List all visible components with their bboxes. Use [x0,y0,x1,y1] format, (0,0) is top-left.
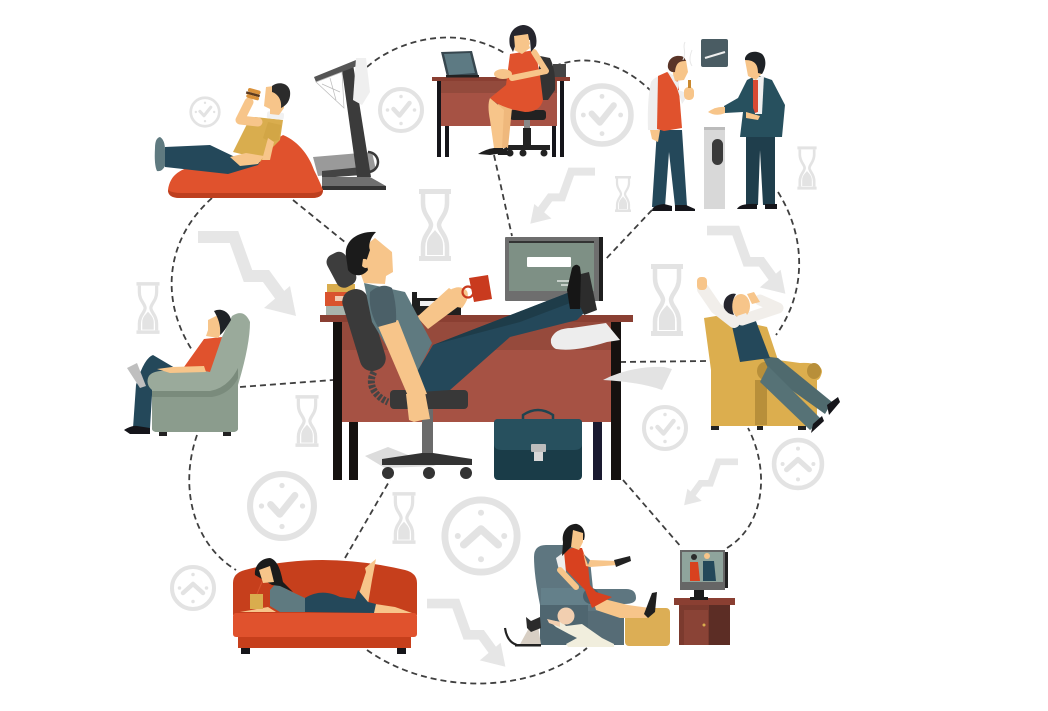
tv stand [674,598,735,645]
gray paper under chair [365,447,436,468]
man reclining [346,232,597,422]
left armchair man [124,310,250,436]
ashtray bin [704,127,725,209]
yellow armchair man [697,277,840,433]
legs [133,355,175,428]
paper tray [412,292,461,315]
recliner [534,545,636,645]
dashed connectors [172,37,799,684]
woman [556,524,657,618]
clocks [172,86,822,609]
trousers [412,292,587,392]
monitor [505,237,603,301]
no-smoking sign [701,39,728,67]
cat [505,617,541,646]
arm with mug [417,288,467,329]
head [360,238,393,284]
beanbag man eating burger [155,83,323,198]
treadmill [313,58,386,190]
smokers group [648,39,785,211]
hourglasses [136,146,817,544]
recliner with woman, baby and cat [505,524,735,647]
television [680,550,728,600]
red sofa with woman [233,558,417,654]
books [325,284,355,315]
desk body [342,322,612,422]
man in suit [708,52,785,209]
ottoman [625,608,670,646]
armchair [148,313,250,436]
briefcase [494,410,582,480]
paper under foot [551,323,620,350]
office chair small [506,56,555,156]
woman at desk [432,25,570,157]
office chair [324,249,472,479]
shoes [567,265,583,309]
falling paper [603,367,672,390]
mug [462,275,492,302]
upper body [184,337,222,372]
baby [547,608,614,647]
trend arrows [198,172,785,667]
torso [364,283,432,382]
smoking man [648,42,695,211]
central desk [320,232,672,480]
arm down [378,320,427,396]
desk legs [333,322,621,480]
